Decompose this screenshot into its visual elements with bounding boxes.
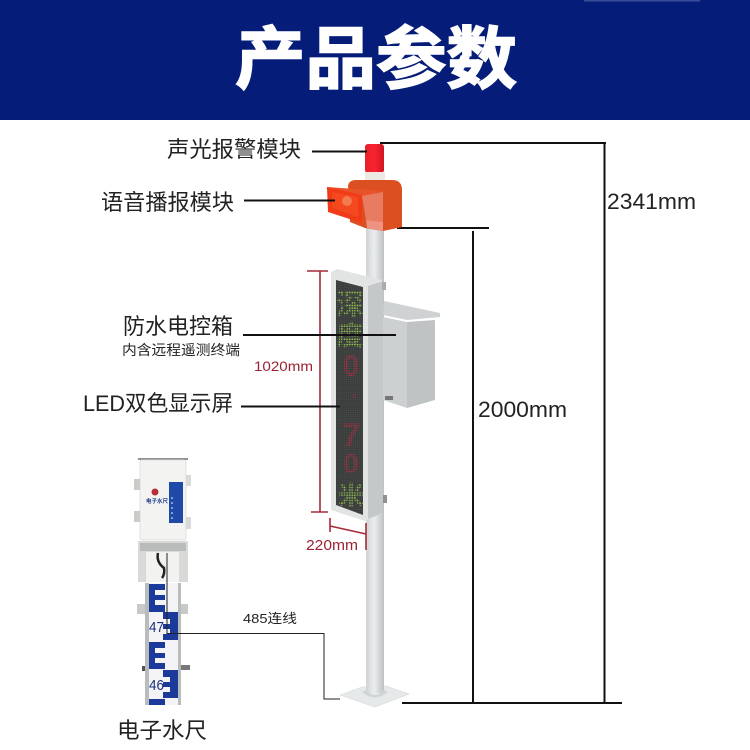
gauge mark 46: 46: [149, 677, 164, 694]
pole and base plate: [340, 228, 409, 707]
label: 485 wiring: 485连线: [243, 611, 297, 626]
label: 2000mm: 2000mm: [478, 397, 567, 422]
gauge mounting bracket: [138, 541, 188, 582]
LED readout text: 0: [343, 350, 359, 383]
gauge terminal box: 电子水尺: [146, 497, 168, 505]
waterproof control box: [383, 301, 440, 408]
LED readout text: .: [351, 378, 357, 403]
callout: waterproof control box: 防水电控箱: [123, 314, 233, 339]
LED readout text: 深: [336, 289, 364, 320]
LED readout text: 0: [343, 448, 359, 479]
alarm lamp and voice horn: [327, 144, 402, 231]
LED readout text: 度: [336, 321, 364, 351]
electronic water gauge: [134, 458, 191, 705]
485 connection line: [167, 553, 340, 699]
callout: waterproof control box: 内含远程遥测终端: [122, 342, 240, 358]
staff gauge ruler: [137, 583, 190, 705]
label: 220mm: 220mm: [306, 537, 358, 554]
LED readout text: [336, 289, 364, 511]
gauge terminal box: [134, 458, 191, 540]
red dimension 1020mm: [254, 271, 328, 512]
icon: red warning lamp: [365, 144, 385, 183]
callout: voice broadcast module: 语音播报模块: [101, 190, 234, 215]
height dimension 2000mm: [397, 228, 567, 703]
label: electronic water gauge: 电子水尺: [117, 718, 207, 743]
label: 2341mm: 2341mm: [607, 189, 696, 214]
header banner: [0, 0, 750, 120]
title: 产品参数: [235, 22, 517, 98]
LED dual-colour display: [331, 269, 387, 521]
LED readout text: 7: [342, 417, 360, 455]
callout: waterproof control box: [122, 314, 396, 358]
icon: voice broadcast horn box: [327, 180, 402, 231]
callout: LED dual-colour screen: LED双色显示屏: [83, 391, 233, 416]
LED readout text: 米: [338, 481, 364, 511]
red dimension 220mm: [306, 518, 366, 554]
label: 1020mm: 1020mm: [254, 358, 313, 374]
total height dimension 2341mm: [380, 143, 696, 703]
callout: sound and light alarm module: 声光报警模块: [167, 137, 301, 162]
gauge mark 47: 47: [149, 619, 164, 636]
